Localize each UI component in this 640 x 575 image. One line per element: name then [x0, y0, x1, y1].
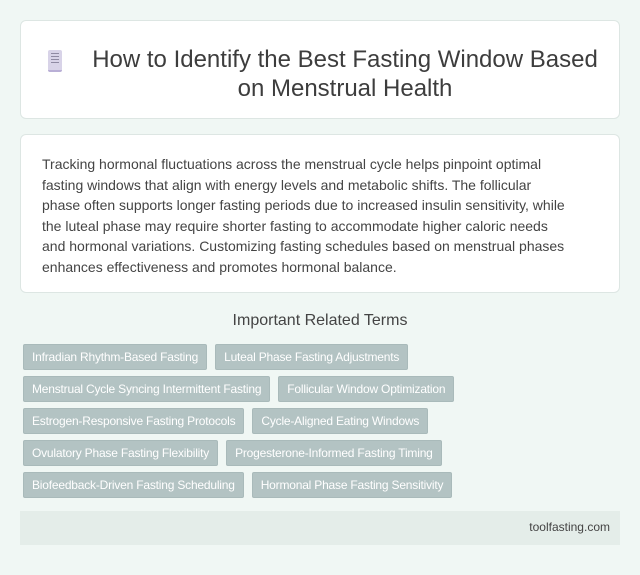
title: How to Identify the Best Fasting Window Based on Menstrual Health — [92, 46, 598, 102]
tags: Menstrual Cycle Syncing Intermittent Fasting — [32, 382, 261, 396]
related terms heading: Important Related Terms — [233, 312, 407, 329]
footer source text: toolfasting.com — [529, 520, 610, 534]
tags: Hormonal Phase Fasting Sensitivity — [261, 478, 443, 492]
description text: Tracking hormonal fluctuations across the menstrual cycle helps pinpoint optimal fasting windows that align with energy levels and metabolic shifts. The follicular phase often supports longer fasting periods due to increased insulin sensitivity, while the luteal phase may require shorter fasting to accommodate higher caloric needs and hormonal variations. Customizing fasting schedules based on menstrual phases enhances effectiveness and promotes hormonal balance. — [42, 156, 565, 274]
icon: document — [48, 50, 62, 72]
tags: Biofeedback-Driven Fasting Scheduling — [32, 478, 235, 492]
header card — [20, 20, 620, 119]
description panel — [20, 134, 620, 293]
tags: Infradian Rhythm-Based Fasting — [32, 350, 198, 364]
tags: Cycle-Aligned Eating Windows — [261, 414, 419, 428]
tags: Follicular Window Optimization — [287, 382, 445, 396]
tags: Ovulatory Phase Fasting Flexibility — [32, 446, 209, 460]
tags: Progesterone-Informed Fasting Timing — [235, 446, 433, 460]
tags — [23, 344, 454, 498]
tags: Luteal Phase Fasting Adjustments — [224, 350, 399, 364]
footer — [20, 511, 620, 545]
tags: Estrogen-Responsive Fasting Protocols — [32, 414, 235, 428]
